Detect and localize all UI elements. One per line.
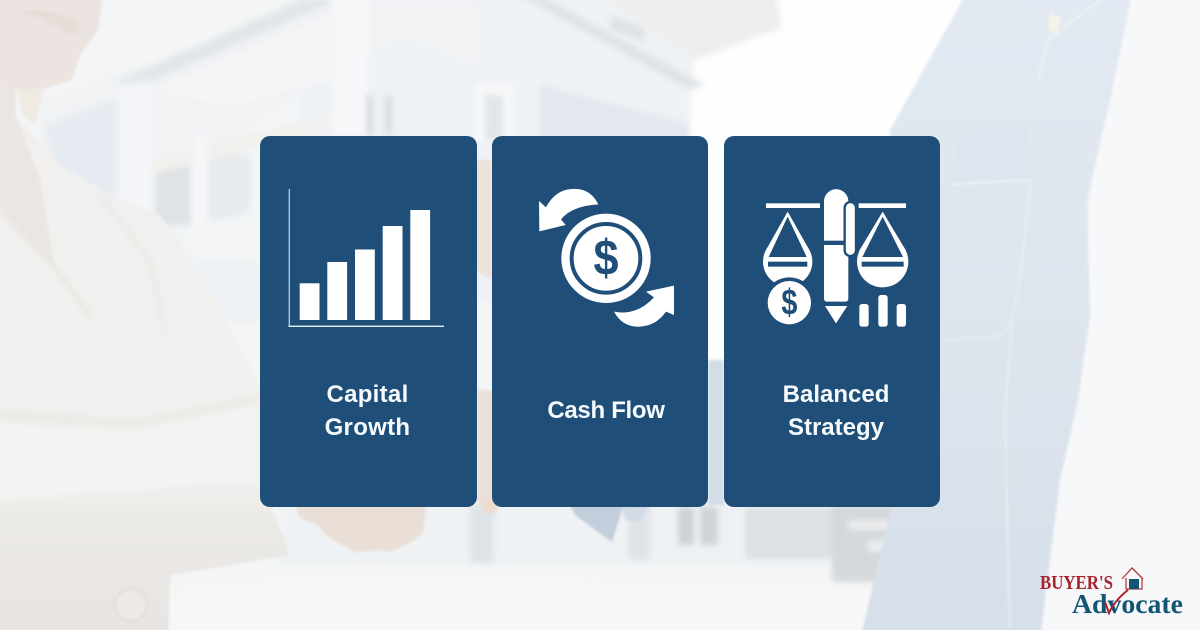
man denim shirt: [860, 0, 1133, 630]
icon: dollar coin with circular arrows: $: [593, 231, 619, 287]
sleeve of the man: [570, 505, 640, 542]
panel: cash flow: [492, 136, 708, 507]
hands: [296, 505, 426, 552]
sky: [690, 0, 990, 510]
panel: capital growth: [260, 136, 477, 507]
panel: balanced strategy: [724, 136, 940, 507]
woman blazer: [0, 115, 290, 630]
icon: scales with pen, coin and bars: $: [781, 282, 797, 322]
logo: Buyer's Advocate: Advocate: [1072, 589, 1183, 619]
face and neck: [0, 0, 103, 90]
heading: balanced strategy: [783, 381, 889, 441]
ground: [170, 575, 890, 630]
icon: rising bar chart: [288, 189, 444, 327]
white shirt on the right: [1020, 0, 1200, 630]
lower house: [280, 500, 900, 565]
house wall and eaves: [300, 0, 780, 300]
heading: balanced strategy: Strategy: [788, 414, 884, 441]
heading: capital growth: Capital: [326, 381, 409, 408]
heading: cash flow: Cash Flow: [547, 397, 665, 424]
heading: capital growth: [325, 381, 410, 441]
house left wing: [40, 0, 480, 300]
shirt pocket: [950, 125, 1032, 184]
heading: balanced strategy: Balanced: [783, 381, 889, 408]
heading: capital growth: Growth: [325, 414, 410, 441]
icon: dollar coin with circular arrows: [539, 188, 674, 327]
logo: Buyer's Advocate: BUYER'S: [1040, 573, 1113, 594]
icon: scales with pen, coin and bars: [763, 189, 908, 327]
